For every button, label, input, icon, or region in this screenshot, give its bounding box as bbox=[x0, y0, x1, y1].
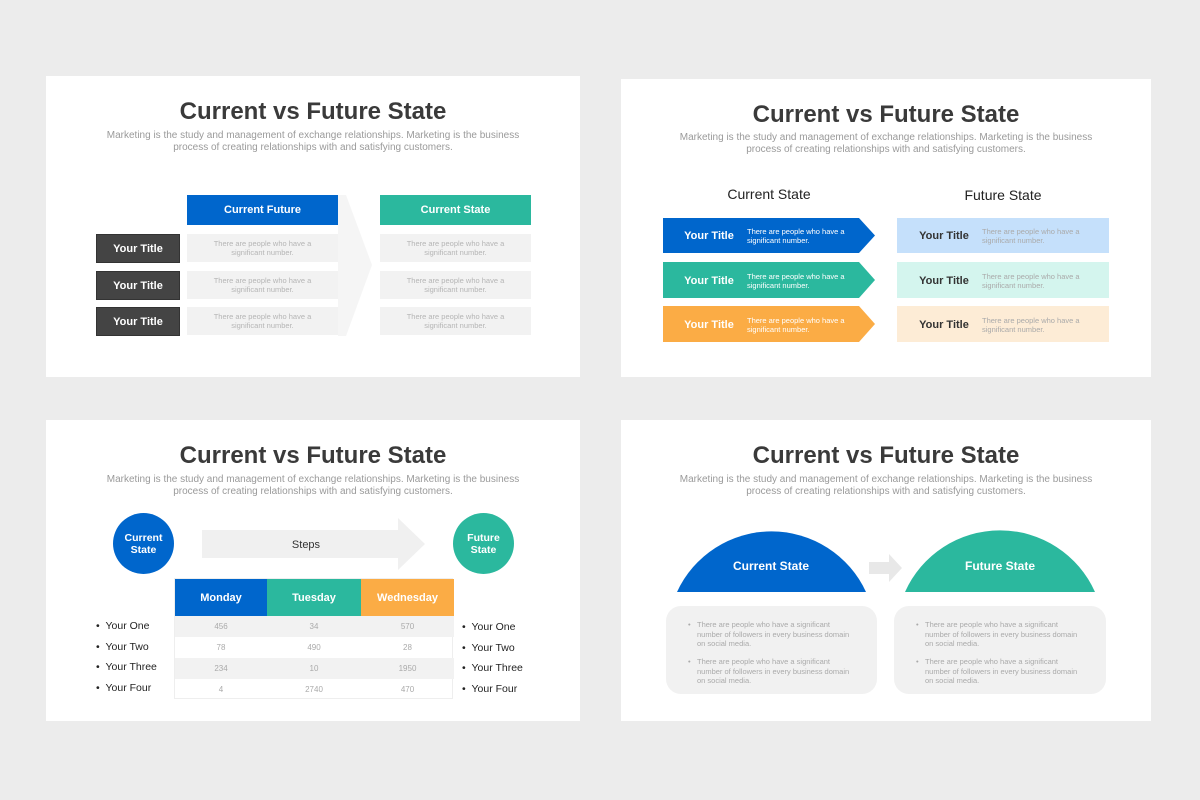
header current bbox=[187, 195, 338, 225]
future cells: There are people who have a bbox=[407, 276, 504, 285]
future cells bbox=[380, 234, 531, 335]
box future: number of followers in every business domain bbox=[925, 630, 1077, 638]
dome future bbox=[905, 530, 1095, 592]
bullet list right: • Your One bbox=[462, 621, 516, 633]
header future: Current State bbox=[421, 204, 490, 216]
table: 78 bbox=[217, 643, 225, 652]
heading current: Current State bbox=[727, 186, 811, 202]
table: 570 bbox=[401, 622, 414, 631]
table: 1950 bbox=[399, 664, 416, 673]
dome current: Current State bbox=[733, 559, 809, 573]
arrow steps bbox=[202, 518, 424, 570]
current cells: There are people who have a bbox=[214, 276, 311, 285]
box current bbox=[666, 606, 877, 694]
title: Current vs Future State bbox=[753, 101, 1019, 128]
row titles: Your Title bbox=[113, 316, 163, 328]
subtitle: process of creating relationships with and satisfying customers. bbox=[746, 486, 1026, 497]
current cells bbox=[187, 234, 338, 335]
panel: bottom-left steps table bbox=[46, 420, 580, 721]
dome future: Future State bbox=[965, 559, 1035, 573]
table: Wednesday bbox=[377, 592, 438, 604]
boxes future: There are people who have a bbox=[982, 272, 1080, 281]
arrows current: significant number. bbox=[747, 236, 810, 245]
subtitle: process of creating relationships with and satisfying customers. bbox=[173, 142, 453, 153]
subtitle bbox=[107, 474, 519, 497]
subtitle: Marketing is the study and management of exchange relationships. Marketing is the business bbox=[107, 130, 519, 141]
current cells: significant number. bbox=[231, 248, 294, 257]
arrow small bbox=[869, 554, 902, 582]
current cells: There are people who have a bbox=[214, 239, 311, 248]
table: 490 bbox=[307, 643, 321, 652]
box current: on social media. bbox=[697, 676, 751, 685]
arrows current: Your Title bbox=[684, 230, 734, 242]
arrows current: There are people who have a bbox=[747, 272, 845, 281]
bullet list right bbox=[462, 621, 523, 694]
box current: • bbox=[688, 657, 691, 666]
table: 470 bbox=[401, 685, 414, 694]
table: 234 bbox=[214, 664, 228, 673]
subtitle: Marketing is the study and management of exchange relationships. Marketing is the business bbox=[107, 474, 519, 485]
table: 10 bbox=[310, 664, 318, 673]
boxes future: significant number. bbox=[982, 236, 1045, 245]
box future: There are people who have a significant bbox=[925, 620, 1058, 629]
boxes future: There are people who have a bbox=[982, 227, 1080, 236]
bullet list left: • Your One bbox=[96, 620, 150, 632]
panel: top-right arrows bbox=[621, 79, 1151, 377]
row titles: Your Title bbox=[113, 280, 163, 292]
subtitle: Marketing is the study and management of exchange relationships. Marketing is the business bbox=[680, 132, 1092, 143]
header future bbox=[380, 195, 531, 225]
box future: • bbox=[916, 657, 919, 666]
table: 2740 bbox=[305, 685, 323, 694]
boxes future: There are people who have a bbox=[982, 316, 1080, 325]
box current: • bbox=[688, 620, 691, 629]
table: 456 bbox=[214, 622, 228, 631]
subtitle: process of creating relationships with and satisfying customers. bbox=[746, 144, 1026, 155]
title: Current vs Future State bbox=[180, 98, 446, 125]
bullet list left bbox=[96, 620, 157, 694]
subtitle: Marketing is the study and management of exchange relationships. Marketing is the business bbox=[680, 474, 1092, 485]
future cells: There are people who have a bbox=[407, 312, 504, 321]
bullet list right: • Your Two bbox=[462, 642, 515, 654]
subtitle bbox=[680, 474, 1092, 497]
box current: There are people who have a significant bbox=[697, 657, 830, 666]
title: Current vs Future State bbox=[753, 442, 1019, 469]
table: Monday bbox=[200, 592, 242, 604]
arrows current: There are people who have a bbox=[747, 227, 845, 236]
arrow steps: Steps bbox=[292, 539, 321, 551]
future cells: significant number. bbox=[424, 321, 487, 330]
circle future: Future bbox=[467, 532, 500, 544]
box current: There are people who have a significant bbox=[697, 620, 830, 629]
circle current bbox=[113, 513, 174, 574]
arrows current: Your Title bbox=[684, 275, 734, 287]
boxes future: significant number. bbox=[982, 325, 1045, 334]
box future: There are people who have a significant bbox=[925, 657, 1058, 666]
panel: top-left table bbox=[46, 76, 580, 377]
row titles bbox=[96, 234, 180, 336]
subtitle bbox=[680, 132, 1092, 155]
boxes future: significant number. bbox=[982, 281, 1045, 290]
table: 4 bbox=[219, 685, 223, 694]
boxes future: Your Title bbox=[919, 275, 969, 287]
box future bbox=[894, 606, 1106, 694]
box future: number of followers in every business domain bbox=[925, 666, 1077, 676]
arrows current: significant number. bbox=[747, 325, 810, 334]
dome current bbox=[677, 531, 866, 592]
table: 28 bbox=[403, 643, 412, 652]
box current: number of followers in every business domain bbox=[697, 630, 849, 638]
circle future: State bbox=[471, 544, 496, 556]
bullet list left: • Your Three bbox=[96, 661, 157, 673]
arrows current bbox=[663, 218, 875, 342]
arrows current: There are people who have a bbox=[747, 316, 845, 325]
panel: bottom-right domes bbox=[621, 420, 1151, 721]
current cells: There are people who have a bbox=[214, 312, 311, 321]
box current: number of followers in every business domain bbox=[697, 666, 849, 676]
boxes future: Your Title bbox=[919, 230, 969, 242]
table: 34 bbox=[310, 622, 318, 631]
row titles: Your Title bbox=[113, 242, 163, 254]
bullet list left: • Your Four bbox=[96, 682, 151, 694]
arrows current: Your Title bbox=[684, 319, 734, 331]
box future: on social media. bbox=[925, 639, 979, 648]
box future: on social media. bbox=[925, 676, 979, 685]
circle future bbox=[453, 513, 514, 574]
future cells: significant number. bbox=[424, 285, 487, 294]
box current: on social media. bbox=[697, 639, 751, 648]
boxes future bbox=[897, 218, 1109, 342]
boxes future: Your Title bbox=[919, 319, 969, 331]
current cells: significant number. bbox=[231, 321, 294, 330]
arrows current: significant number. bbox=[747, 281, 810, 290]
heading future: Future State bbox=[964, 187, 1042, 203]
arrow chevron bbox=[338, 195, 372, 336]
circle current: Current bbox=[125, 532, 162, 544]
future cells: significant number. bbox=[424, 248, 487, 257]
table bbox=[174, 578, 453, 699]
subtitle bbox=[107, 130, 519, 153]
title: Current vs Future State bbox=[180, 442, 446, 469]
table: Tuesday bbox=[292, 592, 336, 604]
bullet list left: • Your Two bbox=[96, 640, 149, 652]
subtitle: process of creating relationships with and satisfying customers. bbox=[173, 486, 453, 497]
circle current: State bbox=[131, 544, 156, 556]
box future: • bbox=[916, 620, 919, 629]
bullet list right: • Your Four bbox=[462, 682, 517, 694]
future cells: There are people who have a bbox=[407, 239, 504, 248]
bullet list right: • Your Three bbox=[462, 662, 523, 674]
current cells: significant number. bbox=[231, 285, 294, 294]
header current: Current Future bbox=[224, 204, 301, 216]
